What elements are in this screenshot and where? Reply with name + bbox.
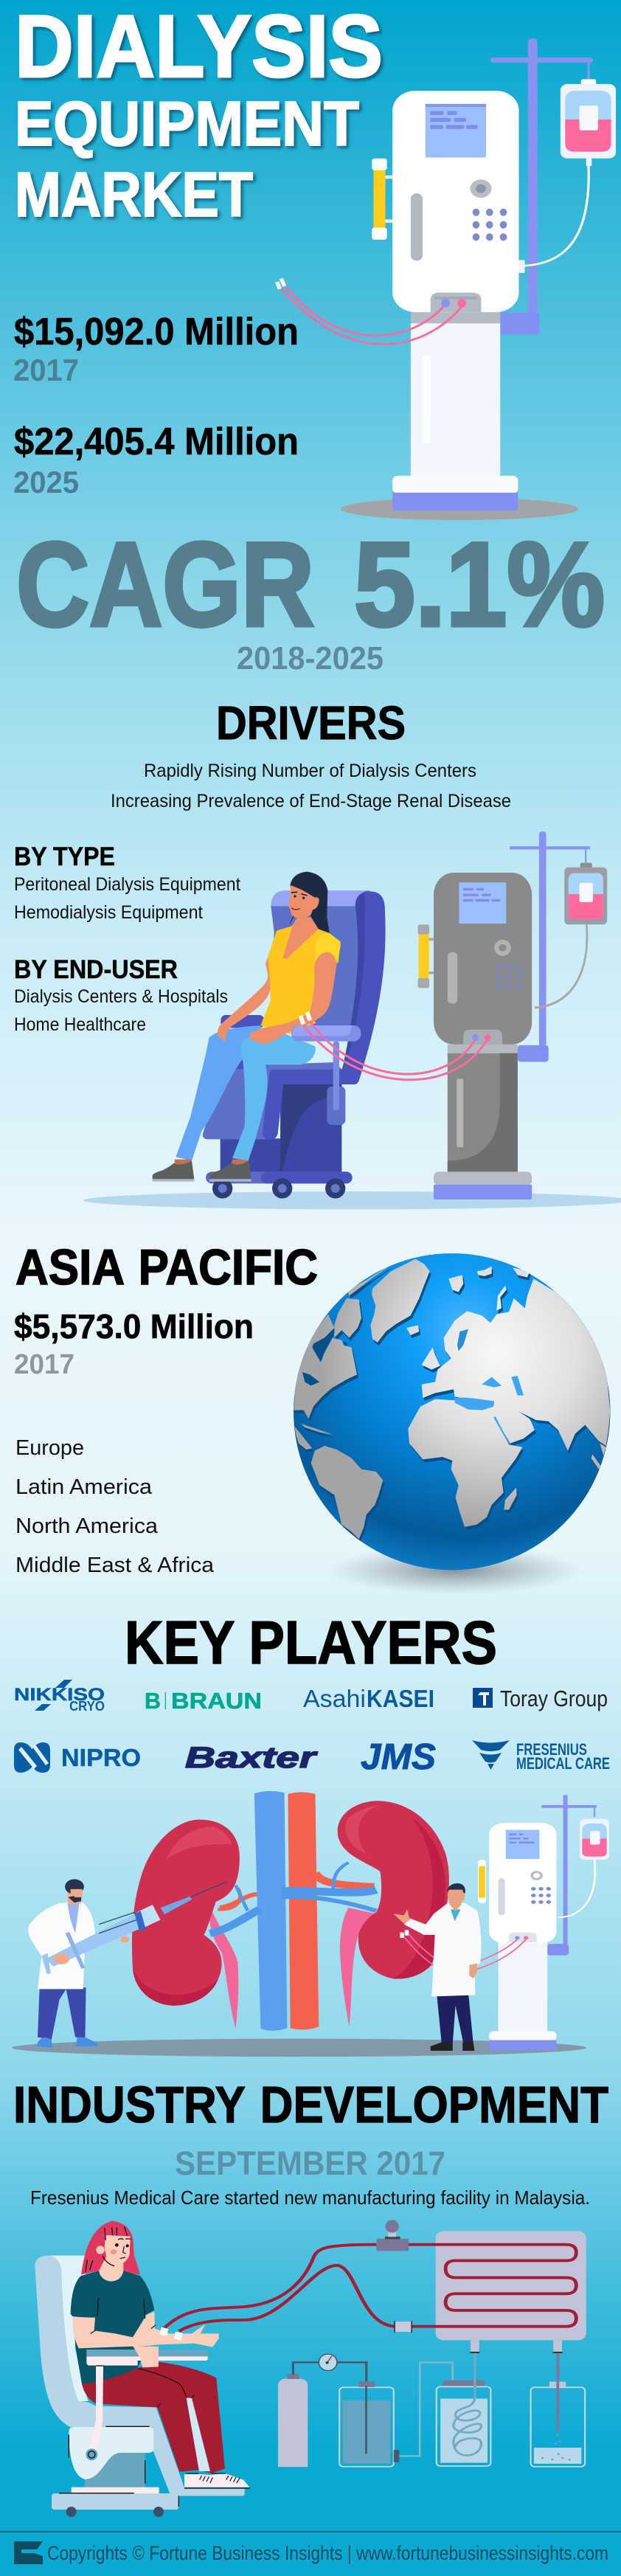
icon: globe — [294, 1253, 611, 1595]
segment: by end-user: BY END-USER — [14, 955, 178, 984]
heading: asia pacific: ASIA PACIFIC — [15, 1239, 318, 1295]
region list: North America — [15, 1514, 159, 1538]
logo: baxter: Baxter — [185, 1742, 318, 1774]
logo: nipro: NIPRO — [61, 1744, 141, 1771]
segment: by end-user: Dialysis Centers & Hospitals — [14, 986, 228, 1007]
logo: asahi kasei: Asahi — [303, 1685, 366, 1712]
segment: by type: Peritoneal Dialysis Equipment — [14, 874, 240, 895]
segment: by end-user: Home Healthcare — [14, 1014, 146, 1035]
stat: 2025 market size: 2025 — [13, 465, 79, 499]
footer divider — [0, 2531, 621, 2532]
region list — [15, 1436, 215, 1577]
logo: jms: JMS — [361, 1737, 436, 1777]
logo: asahi kasei: KASEI — [367, 1685, 434, 1712]
CAGR callout — [16, 518, 605, 676]
stat: asia pacific: $5,573.0 Million — [14, 1307, 254, 1346]
segment: by end-user — [14, 955, 228, 1035]
stat: 2017 market size — [13, 311, 299, 387]
logo: b braun: B — [145, 1688, 161, 1714]
illustration: patient and dialysis circuit — [35, 2220, 586, 2517]
logo: asahi kasei — [303, 1685, 434, 1712]
CAGR callout: CAGR — [16, 518, 314, 651]
segment: by type: Hemodialysis Equipment — [14, 902, 203, 923]
logo: fresenius medical care — [472, 1740, 610, 1773]
region list: Middle East & Africa — [15, 1554, 215, 1577]
stat: 2025 market size: $22,405.4 Million — [14, 420, 299, 463]
logo: nikkiso cryo: NIKKISO — [14, 1685, 105, 1705]
logo: nikkiso cryo — [14, 1680, 105, 1714]
stat: 2025 market size — [13, 420, 299, 499]
illustration: dialysis machine white — [275, 38, 616, 520]
heading: drivers: DRIVERS — [216, 696, 406, 749]
illustration: patient in chair with grey dialysis machine — [83, 831, 621, 1209]
title: EQUIPMENT — [15, 89, 359, 159]
drivers text: Rapidly Rising Number of Dialysis Centers — [144, 761, 476, 781]
region list: Latin America — [15, 1475, 153, 1499]
logo: nipro — [14, 1742, 141, 1773]
stat: asia pacific — [14, 1307, 254, 1380]
segment: by type — [14, 842, 240, 923]
illustration: kidneys with doctors and machine — [12, 1791, 609, 2057]
development text: Fresenius Medical Care started new manufacturing facility in Malaysia. — [30, 2187, 590, 2209]
stat: asia pacific: 2017 — [14, 1349, 74, 1380]
logo: b braun: BRAUN — [171, 1688, 262, 1714]
drivers text — [111, 761, 511, 811]
heading: key players: KEY PLAYERS — [125, 1608, 497, 1677]
drivers text: Increasing Prevalence of End-Stage Renal Disease — [111, 791, 511, 811]
segment: by type: BY TYPE — [14, 842, 115, 871]
CAGR callout: 2018-2025 — [237, 640, 384, 676]
stat: 2017 market size: 2017 — [13, 353, 79, 387]
stat: 2017 market size: $15,092.0 Million — [14, 311, 299, 353]
title — [15, 0, 383, 230]
title: MARKET — [15, 160, 253, 230]
logo: fresenius medical care: FRESENIUS — [516, 1740, 587, 1759]
logo: nikkiso cryo: CRYO — [69, 1699, 105, 1714]
date: SEPTEMBER 2017 — [175, 2144, 445, 2182]
region list: Europe — [15, 1436, 84, 1460]
title: DIALYSIS — [15, 0, 383, 96]
CAGR callout: 5.1% — [354, 518, 605, 651]
